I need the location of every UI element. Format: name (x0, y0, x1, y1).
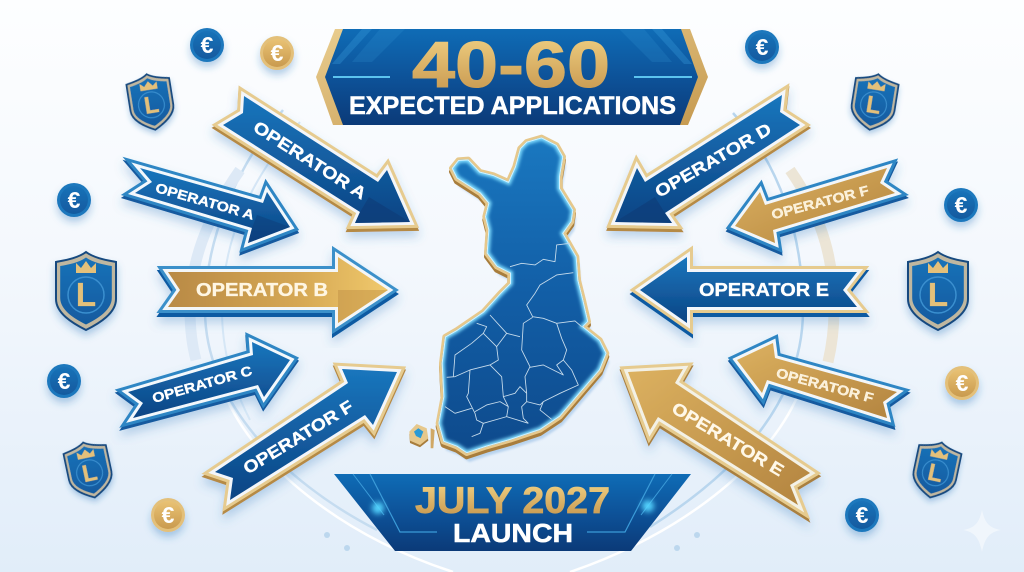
arrow: operator F lower left: OPERATOR F (240, 397, 357, 478)
arrow: operator F upper right: OPERATOR F (770, 183, 870, 222)
coin: blue top left (190, 28, 224, 62)
shield: bottom right (909, 438, 963, 502)
coin: gold top left (260, 36, 294, 70)
map edge glow (438, 137, 607, 453)
coin: gold bottom left: € (162, 502, 175, 528)
arrow: operator F lower right (737, 343, 897, 421)
decorative rings (190, 110, 834, 572)
shield: top left: L (142, 91, 161, 120)
map regions (445, 243, 582, 437)
map of Finland (409, 137, 609, 462)
shield: left large (56, 252, 116, 330)
coin: gold right (945, 366, 979, 400)
coin: gold bottom left (151, 498, 185, 532)
coin: blue right upper (944, 188, 978, 222)
shield: right large: L (928, 276, 948, 313)
coin: blue left upper: € (68, 187, 81, 213)
arrow: operator A small (135, 168, 290, 246)
arrow: operator F lower left (215, 369, 397, 503)
coin: blue bottom right (845, 498, 879, 532)
arrow: operator B: OPERATOR B (196, 280, 328, 300)
shield: bottom right: L (925, 459, 945, 488)
arrow: operator E middle right (640, 257, 857, 327)
arrow: operator B (168, 257, 388, 327)
launch label: LAUNCH (453, 518, 573, 548)
arrow: operator A large: OPERATOR A (250, 117, 370, 203)
coin: blue left upper (57, 183, 91, 217)
shield: top right: L (864, 91, 883, 120)
shield: bottom left (62, 438, 116, 502)
shield: top left (125, 71, 177, 133)
top banner: expected applications (316, 28, 708, 125)
coin: blue right upper: € (955, 192, 968, 218)
subheading: EXPECTED APPLICATIONS (349, 92, 676, 120)
arrow: operator E lower right (628, 369, 810, 508)
coin: blue left lower (47, 364, 81, 398)
icon: sparkle (963, 510, 1001, 552)
arrow: operator A large (223, 96, 410, 226)
coin: gold top left: € (271, 40, 284, 66)
Aland islands (409, 424, 435, 448)
arrow: operator E middle right: OPERATOR E (699, 280, 829, 300)
coin: blue top right: € (756, 34, 769, 60)
arrow: operator D: OPERATOR D (652, 119, 775, 201)
arrow: operator A small: OPERATOR A (154, 180, 256, 223)
coin: blue bottom right: € (856, 502, 869, 528)
coin: gold right: € (956, 370, 969, 396)
bottom banner: launch date (334, 474, 691, 551)
coin: blue left lower: € (58, 368, 71, 394)
arrow: operator C (128, 342, 290, 421)
shield: left large: L (76, 276, 96, 313)
arrow: operator F lower right: OPERATOR F (775, 365, 875, 406)
shield: right large (908, 252, 968, 330)
shield: bottom left: L (80, 459, 100, 488)
arrow: operator D (615, 95, 800, 226)
shield: top right (848, 71, 900, 133)
arrow: operator F upper right (735, 168, 895, 246)
launch date text: JULY 2027 (415, 480, 610, 521)
coin: blue top right (745, 30, 779, 64)
arrow: operator E lower right: OPERATOR E (668, 399, 787, 480)
headline number: 40-60 (412, 28, 610, 101)
arrow: operator C: OPERATOR C (151, 363, 254, 406)
coin: blue top left: € (201, 32, 214, 58)
